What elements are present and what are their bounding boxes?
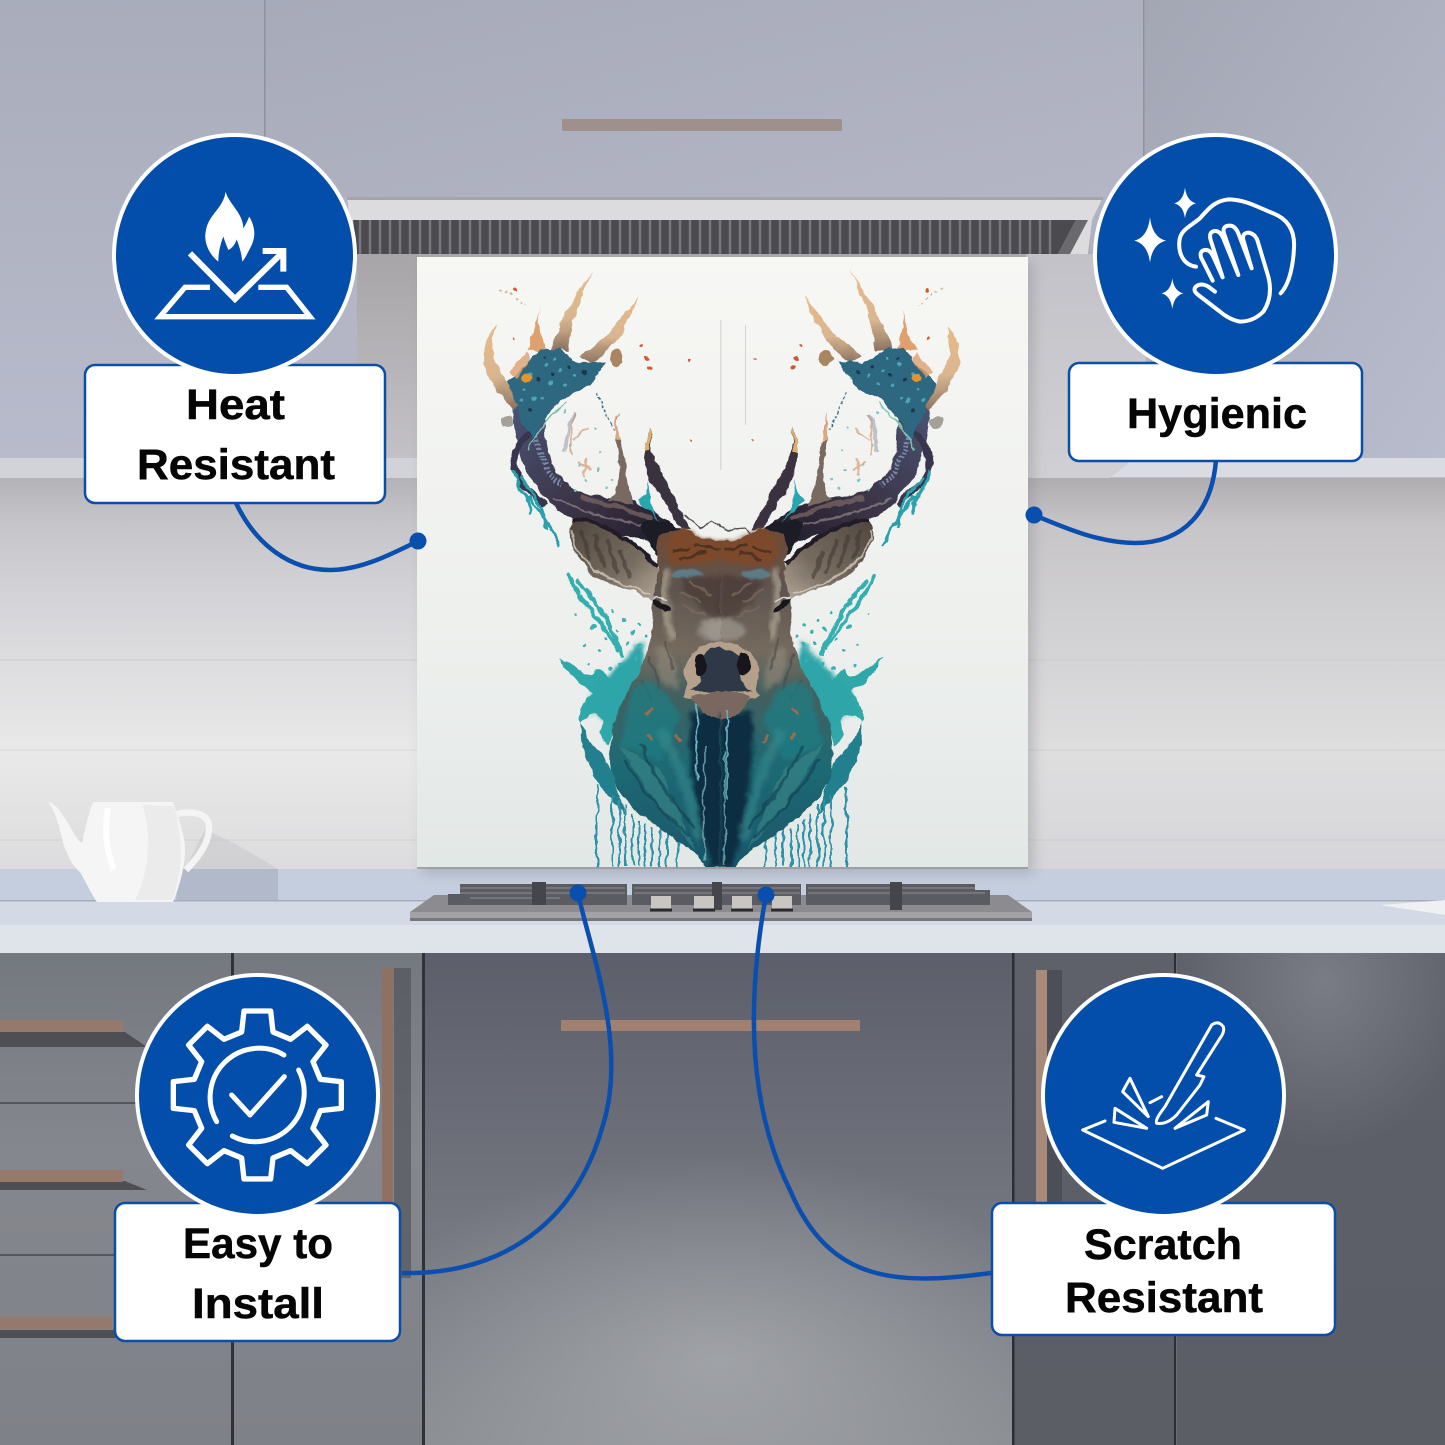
label box: scratch resistant xyxy=(992,1203,1335,1335)
glass panel with stag artwork xyxy=(417,257,1034,874)
icon: wiping hand with sparkles xyxy=(1134,188,1294,322)
lower cabinets xyxy=(0,953,1445,1445)
door handle shadow xyxy=(394,968,411,1278)
badge circle: scratch resistant xyxy=(1043,975,1284,1216)
callout: scratch resistant xyxy=(992,975,1335,1335)
upper cabinets xyxy=(0,0,1445,460)
badge circle: easy to install xyxy=(137,975,378,1216)
wall xyxy=(0,254,1445,870)
callout: easy to install xyxy=(115,975,400,1341)
label box: hygienic xyxy=(1069,363,1362,461)
label text: scratch resistant: Scratch xyxy=(1084,1221,1242,1269)
connector: hygienic xyxy=(1026,460,1216,543)
connector: easy to install xyxy=(402,884,611,1273)
label text: hygienic: Hygienic xyxy=(1127,390,1307,438)
range hood xyxy=(347,197,1103,254)
counter and backsplash strip xyxy=(0,869,1445,953)
stag illustration xyxy=(484,270,959,867)
label box: easy to install xyxy=(115,1203,400,1341)
cabinet handle xyxy=(562,119,842,131)
badge circle: hygienic xyxy=(1095,135,1336,376)
label text: scratch resistant: Resistant xyxy=(1065,1274,1263,1322)
callout: hygienic xyxy=(1069,135,1362,461)
cooktop xyxy=(410,882,1032,921)
badge circle: heat resistant xyxy=(114,135,355,376)
label text: heat resistant: Heat xyxy=(186,381,285,429)
label text: easy to install: Easy to xyxy=(183,1220,333,1268)
connector: scratch resistant xyxy=(754,886,991,1278)
icon: knife scratching surface xyxy=(1083,1023,1244,1168)
teapot xyxy=(48,802,278,902)
icon: flame over surface xyxy=(160,192,310,317)
label text: easy to install: Install xyxy=(192,1280,324,1328)
label text: heat resistant: Resistant xyxy=(137,441,335,489)
icon: gear with check xyxy=(173,1011,341,1179)
connector: heat resistant xyxy=(236,503,426,570)
callout: heat resistant xyxy=(85,135,385,503)
label box: heat resistant xyxy=(85,365,385,503)
brown handles xyxy=(0,1020,123,1032)
